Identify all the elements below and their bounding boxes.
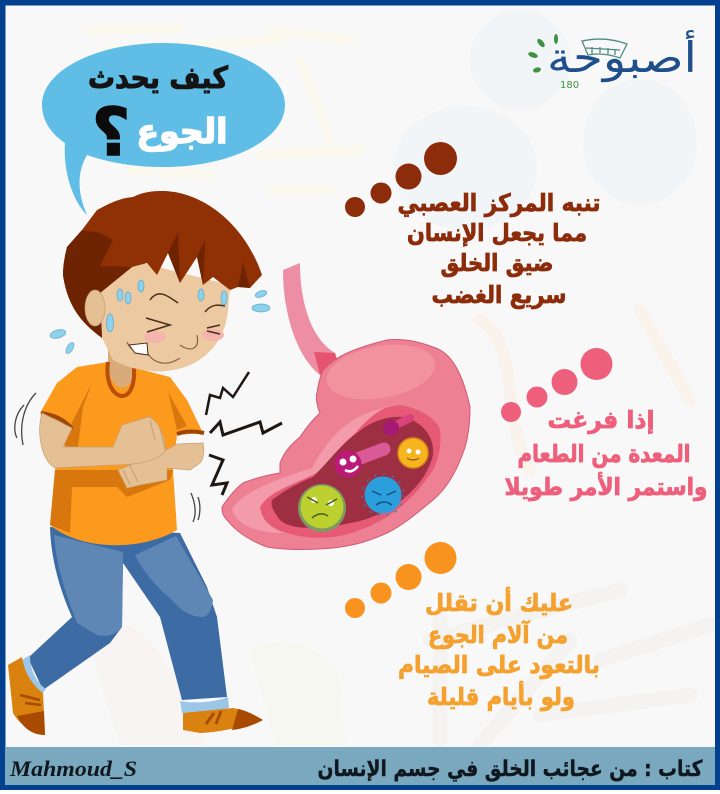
hair: [63, 191, 262, 338]
folded flap: [232, 408, 385, 533]
germ: green: [298, 484, 346, 532]
logo leaves: [527, 34, 558, 73]
footer bar: [5, 747, 715, 785]
text block: orange: ولو بأيام قليلة: [427, 681, 575, 711]
stomach with germs: [222, 263, 470, 549]
heading line 2: الجوع: [136, 112, 228, 152]
text block: brown: تنبه المركز العصبي: [398, 189, 600, 217]
logo wordmark: أصبوحة: [547, 30, 697, 82]
author signature: Mahmoud_S: [9, 756, 137, 781]
text block: brown: سريع الغضب: [432, 281, 566, 309]
text block: brown: [398, 189, 600, 309]
text block: pink: [504, 406, 708, 501]
arms and hands: [40, 413, 204, 488]
pain bolts: [206, 372, 282, 495]
logo number: 180: [560, 80, 579, 91]
logo: [527, 30, 697, 91]
trousers: [22, 527, 229, 713]
heading line 1: كيف يحدث: [88, 61, 228, 96]
germ: yellow: [398, 438, 428, 468]
upper highlight: [322, 337, 440, 407]
text block: brown: مما يجعل الإنسان: [407, 219, 587, 247]
shake lines: [15, 393, 200, 522]
germ: purple worm: [383, 418, 410, 436]
logo building icon: [582, 39, 627, 58]
boy character: [8, 191, 270, 735]
text block: orange: بالتعود على الصيام: [398, 651, 600, 679]
speech bubble: [42, 43, 285, 215]
text block: orange: [398, 587, 600, 711]
stomach cavity: [271, 417, 433, 528]
dots: pink: [501, 348, 612, 422]
text block: brown: ضيق الخلق: [440, 249, 554, 277]
dots: brown: [345, 142, 457, 217]
germ: blue: [362, 474, 404, 516]
neck: [108, 350, 134, 393]
ear: [85, 290, 105, 326]
text block: orange: عليك أن تقلل: [425, 587, 573, 617]
germ: magenta worm: [334, 449, 384, 478]
esophagus: [283, 263, 335, 375]
stomach body: [222, 339, 470, 549]
dots: orange: [345, 542, 456, 618]
orange shirt: [40, 362, 204, 545]
inner rim: [260, 405, 441, 538]
sweat drops: [49, 280, 270, 355]
question mark: ؟: [92, 94, 130, 171]
text block: pink: إذا فرغت: [548, 406, 654, 434]
head: [100, 260, 230, 371]
shoes: [8, 657, 263, 735]
text block: orange: من آلام الجوع: [428, 620, 568, 649]
